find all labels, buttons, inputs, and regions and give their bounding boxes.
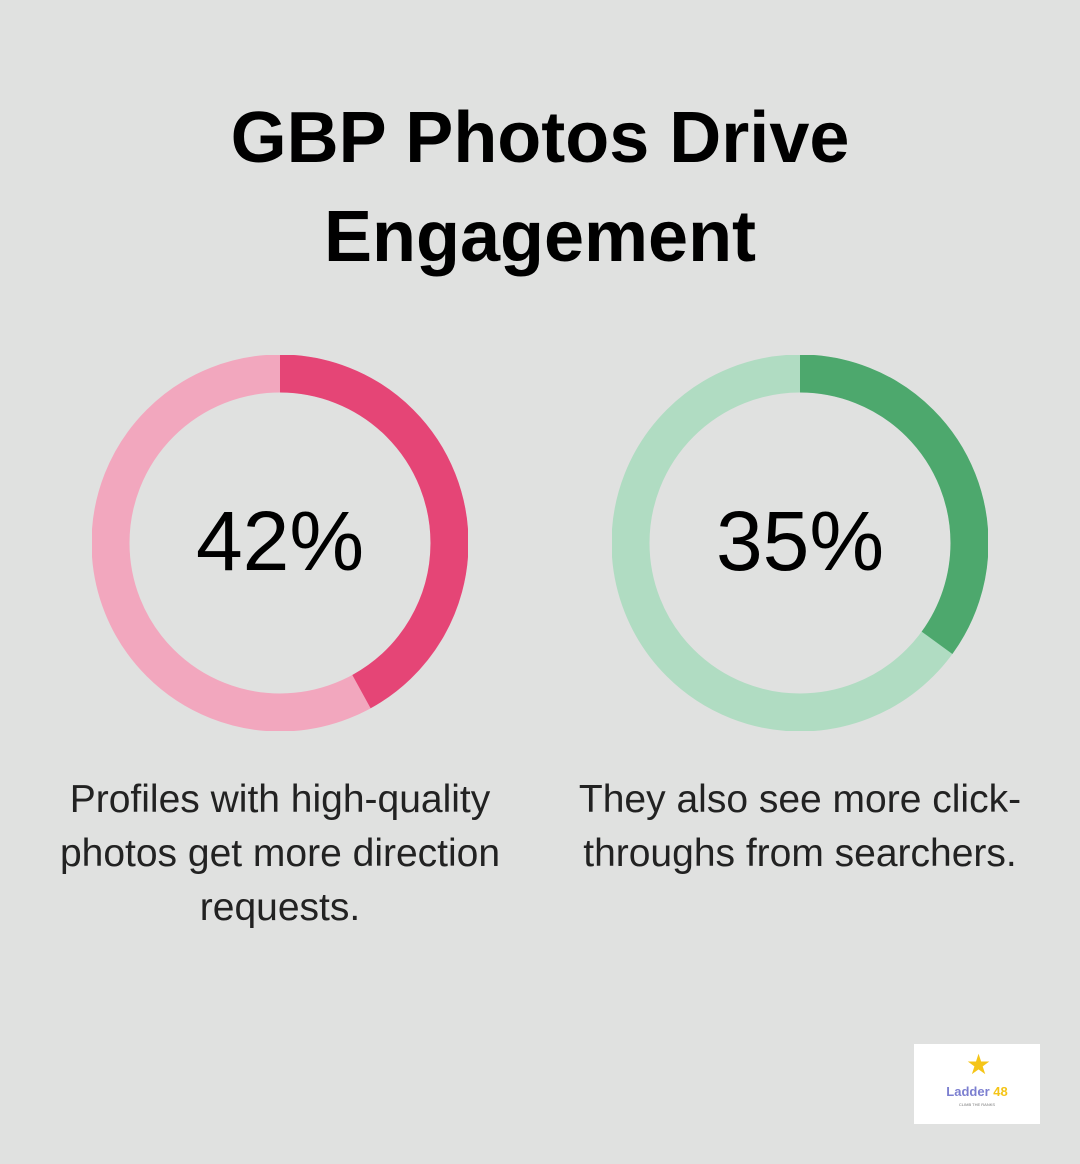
panel: 35% donut [579,355,1021,875]
caption right: They also see more click-throughs from searchers. [579,778,1021,875]
title [231,98,849,277]
logo text: Ladder 48 [946,1084,1008,1099]
caption left: Profiles with high-quality photos get more direction requests. [60,778,500,929]
title: Engagement [324,197,756,277]
panel: 42% donut [60,355,500,929]
icon: star: ★ [966,1049,991,1080]
title: GBP Photos Drive [231,98,849,178]
donut chart: 42% [92,355,468,731]
percentage 42: 42% [196,494,364,588]
logo [914,1044,1040,1124]
percentage 35: 35% [716,494,884,588]
logo: CLIMB THE RANKS [959,1102,995,1107]
donut chart: 35% [612,355,988,731]
